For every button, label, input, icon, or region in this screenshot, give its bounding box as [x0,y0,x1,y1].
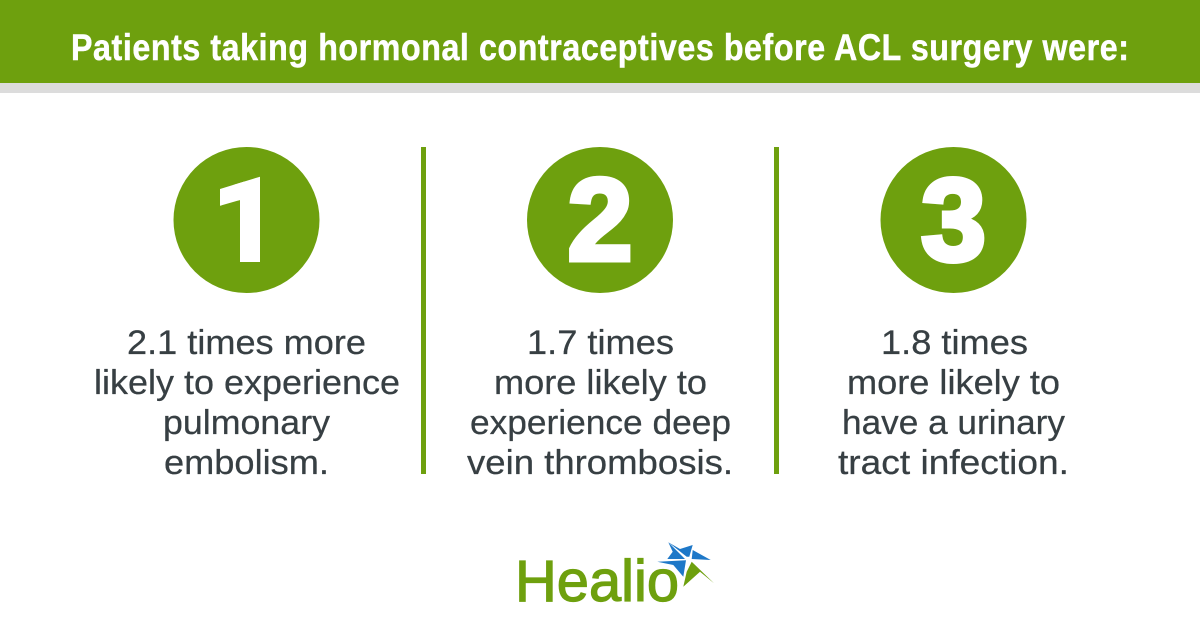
divider 1 [421,147,426,474]
header band [0,0,1200,93]
panel: item 2 [467,147,733,482]
icon: star [657,542,714,587]
text: urinary tract infection [838,324,1069,482]
title: Patients taking hormonal contraceptives before ACL surgery were: [71,28,1129,69]
text: pulmonary embolism: pulmonary [163,404,330,442]
text: deep vein thrombosis: vein thrombosis. [467,444,733,482]
number badge 3: 3 [921,154,986,285]
number badge 2 [527,147,673,293]
number badge 3 [880,147,1026,293]
text: deep vein thrombosis: experience deep [470,404,731,442]
text: deep vein thrombosis [467,324,733,482]
text: urinary tract infection: more likely to [847,364,1060,402]
text: urinary tract infection: tract infection. [838,444,1069,482]
divider 2 [774,147,779,474]
logo: Healio: Healio [515,549,679,614]
panel: item 3 [838,147,1069,482]
panel: item 1 [94,147,400,482]
number badge 2: 2 [567,154,633,285]
number badge 1 [174,147,320,293]
text: urinary tract infection: have a urinary [842,404,1065,442]
text: pulmonary embolism [94,324,400,482]
number badge 1: 1 [210,156,276,287]
text: pulmonary embolism: embolism. [164,444,329,482]
text: pulmonary embolism: likely to experience [94,364,400,402]
text: deep vein thrombosis: 1.7 times [527,324,674,362]
text: pulmonary embolism: 2.1 times more [127,324,366,362]
text: deep vein thrombosis: more likely to [494,364,707,402]
text: urinary tract infection: 1.8 times [881,324,1028,362]
